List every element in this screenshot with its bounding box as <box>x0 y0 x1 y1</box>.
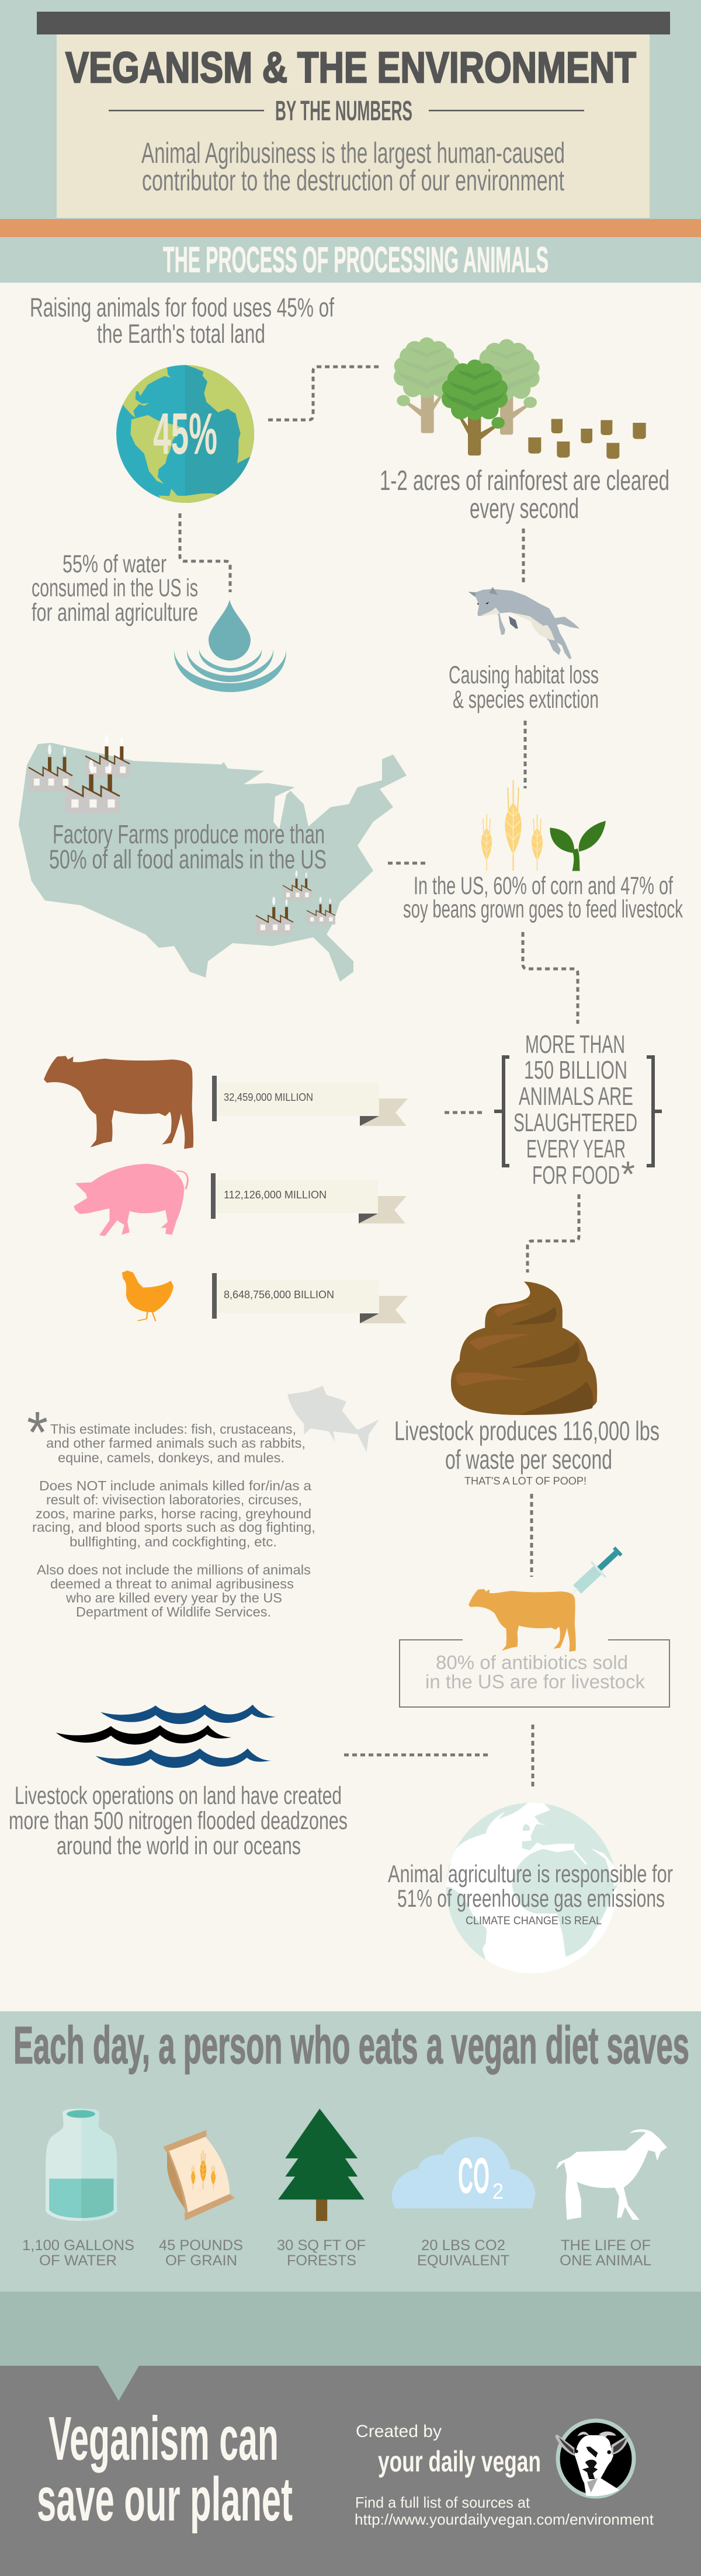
chart: US map with factories <box>19 735 407 982</box>
sources text: http://www.yourdailyvegan.com/environment <box>355 2511 654 2528</box>
header band <box>0 0 701 283</box>
factory farms text: Factory Farms produce more than <box>53 819 325 849</box>
connector: forest to wolf <box>522 529 525 583</box>
label: forests <box>277 2237 366 2269</box>
callout: 150 billion animals: * <box>621 1155 635 1195</box>
connector: globe to water <box>180 513 230 592</box>
ribbon: cattle <box>212 1076 408 1126</box>
icon: CO2 cloud <box>392 2137 535 2209</box>
ribbon: chickens: 8,648,756,000 BILLION <box>224 1289 334 1301</box>
deadzones text: around the world in our oceans <box>57 1832 301 1860</box>
asterisk: * <box>27 1400 48 1465</box>
ribbon: cattle: 32,459,000 MILLION <box>224 1091 313 1103</box>
footnote text: result of: vivisection laboratories, circuses, <box>46 1492 302 1507</box>
footnote text: This estimate includes: fish, crustaceans, <box>50 1421 296 1437</box>
icon: CO2 cloud: CO <box>458 2148 490 2204</box>
footnote text: Department of Wildlife Services. <box>76 1604 271 1619</box>
water text <box>32 550 198 627</box>
sources text <box>355 2494 654 2528</box>
tree: back left <box>394 338 460 433</box>
rainforest text: every second <box>470 493 579 524</box>
credit <box>356 2422 541 2478</box>
water text: consumed in the US is <box>32 574 198 602</box>
connector: callout to waste <box>528 1194 579 1273</box>
subtitle: BY THE NUMBERS <box>275 96 412 127</box>
panel: footer <box>0 2366 701 2576</box>
label: water <box>22 2237 134 2269</box>
icon: CO2 cloud: 2 <box>492 2179 504 2204</box>
icon: fir tree <box>278 2109 365 2221</box>
footnote text: bullfighting, and cockfighting, etc. <box>70 1534 277 1549</box>
label: animal <box>560 2237 651 2269</box>
closing statement: Veganism can <box>48 2404 279 2473</box>
footnote text: racing, and blood sports such as dog fighting, <box>32 1520 315 1535</box>
land use text: Raising animals for food uses 45% of <box>30 293 334 322</box>
icon: globe 45% <box>116 362 259 508</box>
callout: 150 billion animals: FOR FOOD <box>532 1161 620 1190</box>
label: animal: ONE ANIMAL <box>560 2252 651 2269</box>
credit: Created by <box>356 2422 442 2441</box>
header statement <box>141 137 565 197</box>
connector: wolf to crops <box>523 721 527 788</box>
header panel <box>57 34 650 218</box>
icon: factory <box>307 896 335 924</box>
credit: your daily vegan <box>378 2445 541 2478</box>
icon: water drop <box>174 600 286 692</box>
antibiotics box <box>400 1640 669 1707</box>
label: grain: 45 POUNDS <box>159 2237 243 2254</box>
connector: globe to forest <box>268 367 381 420</box>
footnote text: Also does not include the millions of animals <box>37 1562 311 1577</box>
ribbon: chickens <box>212 1273 408 1323</box>
dark top bar <box>37 12 670 34</box>
icon: pig <box>74 1164 188 1236</box>
label: CO2: 20 LBS CO2 <box>421 2237 505 2254</box>
rainforest text <box>380 465 669 524</box>
callout: 150 billion animals: SLAUGHTERED <box>513 1108 637 1137</box>
icon: chicken <box>122 1271 173 1321</box>
habitat loss text: & species extinction <box>453 686 599 714</box>
bracket right <box>647 1057 662 1166</box>
label: water: 1,100 GALLONS <box>22 2237 134 2254</box>
tree: back right <box>474 339 540 434</box>
icon: trees and stumps <box>394 338 646 459</box>
water text: for animal agriculture <box>32 599 198 627</box>
callout: 150 billion animals: 150 BILLION <box>524 1056 627 1084</box>
icon: factory <box>65 760 120 814</box>
label: forests: 30 SQ FT OF <box>277 2237 366 2254</box>
closing statement: save our planet <box>37 2465 293 2534</box>
bracket left <box>494 1057 509 1166</box>
closing statement <box>37 2404 293 2534</box>
water text: 55% of water <box>63 550 166 578</box>
icon: bottle <box>46 2109 117 2221</box>
icon: ocean waves <box>56 1705 276 1768</box>
icon: pale globe <box>438 1802 625 1973</box>
label: animal: THE LIFE OF <box>561 2237 651 2254</box>
habitat loss text <box>449 661 599 714</box>
footnote text: and other farmed animals such as rabbits, <box>46 1435 306 1451</box>
callout: 150 billion animals: MORE THAN <box>525 1030 625 1059</box>
deadzones text <box>9 1782 348 1860</box>
panel: vegan savings <box>0 2011 701 2292</box>
icon: cow <box>44 1056 193 1149</box>
connector: waste to antibiotics <box>530 1494 533 1577</box>
footnote text: equine, camels, donkeys, and mules. <box>58 1450 284 1465</box>
logo: goat head <box>555 2421 634 2497</box>
icon: grain bag <box>163 2130 235 2220</box>
stumps <box>528 419 646 459</box>
waste text: THAT'S A LOT OF POOP! <box>464 1475 587 1487</box>
icon: globe 45%: 45% <box>153 401 217 467</box>
footnote text: who are killed every year by the US <box>65 1590 282 1605</box>
connector: deadzones to climate <box>344 1753 490 1757</box>
deadzones text: more than 500 nitrogen flooded deadzones <box>9 1807 348 1835</box>
icon: wolf <box>469 587 580 659</box>
icon: wheat and soy <box>481 780 606 871</box>
icon: factory <box>29 745 72 791</box>
label: grain <box>159 2237 243 2269</box>
icon: factory <box>283 871 311 901</box>
climate text: CLIMATE CHANGE IS REAL <box>466 1915 602 1927</box>
connector: crops to slaughter <box>523 932 578 1024</box>
land use text: the Earth's total land <box>97 319 265 349</box>
callout: 150 billion animals: ANIMALS ARE <box>519 1082 633 1111</box>
connector: ribbon to callout <box>445 1111 485 1114</box>
ribbon: pigs <box>211 1173 407 1223</box>
antibiotics box: in the US are for livestock <box>425 1671 645 1692</box>
waste text <box>394 1416 660 1487</box>
land use text <box>30 293 334 349</box>
tree: front <box>442 360 508 456</box>
darker teal band <box>0 2292 701 2366</box>
icon: factory <box>256 897 293 934</box>
label: CO2 <box>417 2237 509 2269</box>
icon: orange cow <box>469 1589 576 1652</box>
label: CO2: EQUIVALENT <box>417 2252 509 2269</box>
footnote text: Does NOT include animals killed for/in/as a <box>39 1478 311 1493</box>
callout: 150 billion animals <box>494 1030 662 1195</box>
icon: tuna <box>287 1386 379 1452</box>
orange band <box>0 219 701 237</box>
icon: poop <box>451 1281 597 1415</box>
sources text: Find a full list of sources at <box>355 2494 530 2511</box>
footnote text: zoos, marine parks, horse racing, greyhound <box>36 1506 311 1521</box>
connector: antibiotics to climate <box>532 1725 534 1789</box>
speech pointer <box>98 2366 139 2401</box>
label: grain: OF GRAIN <box>165 2252 237 2269</box>
callout: 150 billion animals: EVERY YEAR <box>526 1135 626 1163</box>
habitat loss text: Causing habitat loss <box>449 661 599 689</box>
deadzones text: Livestock operations on land have created <box>15 1782 342 1810</box>
waste text: of waste per second <box>445 1444 612 1475</box>
ribbon: pigs: 112,126,000 MILLION <box>224 1189 327 1201</box>
climate text <box>388 1860 673 1927</box>
footnote text: deemed a threat to animal agribusiness <box>50 1576 294 1591</box>
icon: goat <box>556 2129 667 2220</box>
antibiotics box: 80% of antibiotics sold <box>436 1652 628 1673</box>
factory farms text: 50% of all food animals in the US <box>49 844 327 874</box>
label: forests: FORESTS <box>287 2252 356 2269</box>
icon: factory <box>85 735 130 778</box>
crops text <box>403 872 683 923</box>
label: water: OF WATER <box>39 2252 117 2269</box>
connector: farms to crops <box>388 862 428 864</box>
icon: syringe <box>561 1543 626 1605</box>
factory farms text <box>49 819 327 874</box>
footnote text <box>27 1400 315 1619</box>
